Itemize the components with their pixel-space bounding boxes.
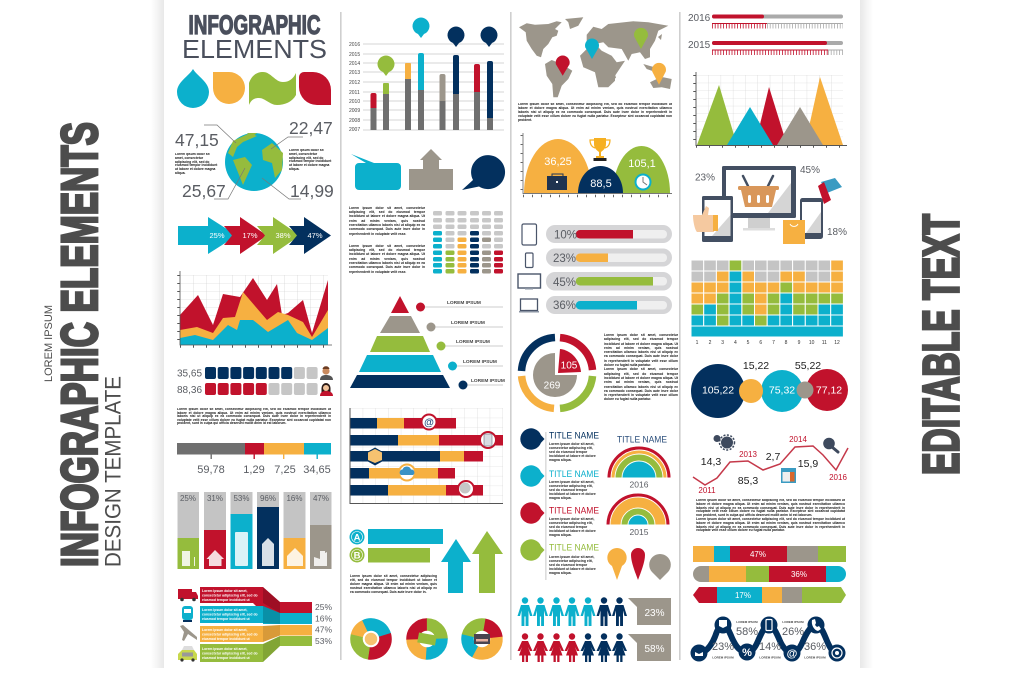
heat grid axis numbers: 11 bbox=[822, 340, 827, 346]
rainbow charts: 2016 bbox=[630, 480, 649, 490]
bar chart: buildings: 47% bbox=[313, 494, 329, 503]
icon: magnifier bbox=[823, 438, 838, 452]
wavy icon chain: 14% bbox=[759, 641, 781, 653]
pyramid chart: LOREM IPSUM bbox=[471, 378, 505, 384]
bar chart: buildings: 31% bbox=[207, 494, 223, 503]
marker pins bbox=[607, 548, 671, 580]
wavy icon chain: @ bbox=[787, 648, 798, 660]
arrow chain bbox=[178, 217, 331, 254]
icon: briefcase bbox=[547, 174, 567, 190]
line chart: 2014 bbox=[789, 435, 807, 444]
text: paragraph column 2 lower: Lorem ipsum dolor sit amet, consectetur adipiscing elit, sed do eiusmod tempor incididunt ut labore et dolore magna aliqua. Ut enim ad minim veniam, quis nostrud exercitation ullamco laboris nisi ut aliquip ex ea commodo consequat. Duis aute irure dolor in reprehenderit in voluptate velit esse. bbox=[349, 244, 425, 274]
bar chart: buildings: 53% bbox=[233, 494, 250, 503]
pyramid chart: LOREM IPSUM bbox=[447, 300, 481, 306]
ribbon chart: consectetur adipiscing elit, sed do bbox=[202, 594, 258, 598]
A B bars bbox=[350, 529, 443, 562]
rainbow charts: TITLE NAME bbox=[617, 434, 667, 444]
icon: train bbox=[182, 606, 193, 622]
ribbon chart: 53% bbox=[315, 636, 332, 646]
ribbon chart: consectetur adipiscing elit, sed do bbox=[202, 632, 258, 636]
title list: TITLE NAME bbox=[549, 542, 599, 552]
icon: tablet badge bbox=[480, 432, 496, 448]
title list: sed do eiusmod tempor bbox=[549, 488, 588, 492]
wavy icon chain: LOREM IPSUM bbox=[782, 620, 804, 624]
pyramid chart: LOREM IPSUM bbox=[463, 359, 497, 365]
donut: credit card bbox=[462, 619, 502, 659]
heat grid axis numbers bbox=[696, 340, 840, 346]
title list: Lorem ipsum dolor sit amet, bbox=[549, 480, 594, 484]
heat grid axis numbers: 4 bbox=[734, 340, 737, 346]
ribbon chart: Lorem ipsum dolor sit amet, bbox=[202, 608, 247, 612]
device shopping illustration: 45% bbox=[800, 165, 820, 176]
segmented bar: rounded: 36% bbox=[791, 570, 807, 579]
wavy icon chain: 26% bbox=[782, 626, 804, 638]
title list: TITLE NAME bbox=[549, 469, 599, 479]
ribbon chart: 16% bbox=[315, 614, 332, 624]
icon: disc badge bbox=[458, 481, 474, 497]
title list: consectetur adipiscing elit, bbox=[549, 446, 593, 450]
bubble chart: 105,22 bbox=[702, 384, 734, 396]
area chart bbox=[178, 271, 332, 346]
title list: consectetur adipiscing elit, bbox=[549, 559, 593, 563]
ribbon chart: Lorem ipsum dolor sit amet, bbox=[202, 589, 247, 593]
icon: thumbs up bbox=[693, 206, 718, 232]
progress bars with device icons: 10% bbox=[554, 230, 577, 242]
title list: magna aliqua. bbox=[549, 458, 572, 462]
column chart with pins: 2010 bbox=[349, 99, 360, 105]
title list: incididunt ut labore et dolore bbox=[549, 567, 596, 571]
bar chart: buildings bbox=[178, 492, 332, 569]
left cover title: DESIGN TEMPLATE bbox=[100, 376, 126, 567]
segmented bar: square: 47% bbox=[750, 550, 766, 559]
radial chart: 269 bbox=[544, 380, 561, 392]
heat grid bbox=[691, 260, 843, 337]
icon: clock bbox=[634, 174, 652, 190]
bubble chart: 55,22 bbox=[795, 360, 821, 372]
hill chart: 105,1 bbox=[628, 158, 656, 170]
icon: plane bbox=[180, 625, 197, 641]
heading: infographic elements bbox=[182, 10, 327, 64]
icon: trophy bbox=[590, 138, 610, 161]
wavy icon chain: 36% bbox=[804, 641, 826, 653]
wavy icon chain: LOREM IPSUM bbox=[759, 656, 781, 660]
ribbon chart: consectetur adipiscing elit, sed do bbox=[202, 612, 258, 616]
heat grid axis numbers: 1 bbox=[696, 340, 699, 346]
hill chart: 88,5 bbox=[590, 178, 612, 190]
ribbon chart: 25% bbox=[315, 602, 332, 612]
wavy icon chain bbox=[690, 616, 846, 662]
arrow chain: 47% bbox=[307, 231, 323, 240]
donut: banknote bbox=[411, 623, 443, 655]
text: radial paragraphs bbox=[604, 333, 678, 415]
title list: Lorem ipsum dolor sit amet, bbox=[549, 517, 594, 521]
square rows: men and women: 35,65 bbox=[177, 368, 202, 380]
world map bbox=[519, 17, 672, 97]
ribbon chart: consectetur adipiscing elit, sed do bbox=[202, 652, 258, 656]
people row: men: 23% bbox=[644, 608, 665, 619]
device shopping illustration: 23% bbox=[695, 172, 715, 184]
text: line chart paragraphs: Lorem ipsum dolor sit amet, consectetur adipiscing elit, sed do eiusmod tempor incididunt ut labore et dolore magna aliqua. Ut enim ad minim veniam, quis nostrud exercitation ullamco laboris nisi ut aliquip ex ea commodo consequat. Duis aute irure dolor in reprehenderit in voluptate velit esse cillum dolore eu fugiat nulla pariatur. bbox=[696, 517, 845, 532]
wavy icon chain: 58% bbox=[736, 626, 758, 638]
bubble chart: 15,22 bbox=[743, 360, 769, 372]
segmented bar: arrow: 17% bbox=[735, 591, 751, 600]
ribbon chart bbox=[178, 587, 332, 662]
segmented bar with values: 59,78 bbox=[197, 464, 225, 476]
icon: gears bbox=[714, 435, 734, 450]
column chart with pins: 2009 bbox=[349, 108, 360, 114]
segmented bar with values: 34,65 bbox=[303, 464, 331, 476]
title list: Lorem ipsum dolor sit amet, bbox=[549, 555, 594, 559]
line chart: 14,3 bbox=[701, 456, 721, 468]
A B bars: A bbox=[354, 532, 361, 544]
progress bars with device icons bbox=[518, 224, 672, 314]
heading: infographic elements: INFOGRAPHIC bbox=[188, 10, 320, 40]
heat grid axis numbers: 3 bbox=[721, 340, 724, 346]
progress bars with device icons: 45% bbox=[553, 277, 576, 289]
segmented bar with values bbox=[177, 443, 331, 476]
icon: price tags bbox=[818, 178, 842, 204]
text: line chart paragraphs bbox=[696, 499, 845, 541]
title list: magna aliqua. bbox=[549, 496, 572, 500]
title list: sed do eiusmod tempor bbox=[549, 563, 588, 567]
icon: at sign: @ bbox=[424, 418, 434, 428]
speech shapes bbox=[351, 149, 505, 190]
icon: phone bbox=[526, 253, 533, 268]
title list: sed do eiusmod tempor bbox=[549, 450, 588, 454]
heat grid axis numbers: 9 bbox=[798, 340, 801, 346]
radial chart bbox=[522, 338, 592, 408]
pyramid chart bbox=[350, 296, 505, 390]
year progress 2016 bbox=[688, 13, 843, 26]
arrow chain: 38% bbox=[275, 231, 291, 240]
bubble chart: 77,12 bbox=[816, 384, 842, 396]
title list: consectetur adipiscing elit, bbox=[549, 521, 593, 525]
globe with values bbox=[175, 118, 334, 201]
bubble chart bbox=[691, 360, 848, 418]
people row: women: 58% bbox=[644, 644, 665, 655]
globe with values: 47,15 bbox=[175, 130, 219, 150]
hill chart bbox=[522, 133, 672, 196]
globe with values: 14,99 bbox=[290, 181, 334, 201]
icon: car bbox=[178, 646, 197, 662]
line chart: 2,7 bbox=[766, 451, 780, 463]
line chart: 2011 bbox=[698, 486, 716, 495]
column chart with pins bbox=[349, 18, 504, 133]
globe with values: 22,47 bbox=[289, 118, 333, 138]
title list: sed do eiusmod tempor bbox=[549, 525, 588, 529]
ribbon chart: Lorem ipsum dolor sit amet, bbox=[202, 628, 247, 632]
wavy icon chain: % bbox=[742, 647, 752, 659]
wavy icon chain: LOREM IPSUM bbox=[712, 656, 734, 660]
heat grid axis numbers: 8 bbox=[785, 340, 788, 346]
square rows: men and women bbox=[177, 366, 333, 396]
arrow chain: 17% bbox=[242, 231, 258, 240]
ribbon chart: eiusmod tempor incididunt ut bbox=[202, 617, 251, 621]
icon: calendar bbox=[781, 468, 796, 483]
title list: incididunt ut labore et dolore bbox=[549, 454, 596, 458]
icon: navy pin bbox=[480, 27, 498, 47]
icon: laptop bbox=[519, 299, 539, 312]
title list bbox=[520, 428, 599, 580]
title list: incididunt ut labore et dolore bbox=[549, 492, 596, 496]
column chart with pins: 2008 bbox=[349, 118, 360, 124]
wavy icon chain: LOREM IPSUM bbox=[804, 656, 826, 660]
icon: woman bbox=[320, 383, 333, 396]
device shopping illustration bbox=[693, 165, 847, 244]
bubble chart: 75,32 bbox=[769, 384, 795, 396]
title list: consectetur adipiscing elit, bbox=[549, 484, 593, 488]
line chart: 2016 bbox=[829, 473, 847, 482]
icon: phone bbox=[800, 198, 823, 239]
column chart with pins: 2015 bbox=[349, 52, 360, 58]
bar chart: buildings: 16% bbox=[286, 494, 303, 503]
year progress 2015: 2015 bbox=[688, 40, 711, 51]
ribbon chart: 47% bbox=[315, 624, 332, 634]
text: radial paragraphs: Lorem ipsum dolor sit amet, consectetur adipiscing elit, sed do eiusmod tempor incididunt ut labore et dolore magna aliqua. Ut enim ad minim veniam, quis nostrud exercitation ullamco laboris nisi ut aliquip ex ea commodo consequat. Duis aute irure dolor in reprehenderit in voluptate velit esse cillum dolore eu fugiat nulla pariatur. bbox=[604, 333, 678, 367]
poster sheet bbox=[151, 0, 873, 668]
gantt chart bbox=[350, 408, 503, 504]
line chart: 85,3 bbox=[738, 475, 758, 487]
bar chart: buildings: 96% bbox=[260, 494, 276, 503]
coloured shapes row bbox=[177, 69, 331, 108]
text: radial paragraphs: Lorem ipsum dolor sit amet, consectetur adipiscing elit, sed do eiusmod tempor incididunt ut labore et dolore magna aliqua. Ut enim ad minim veniam, quis nostrud exercitation ullamco laboris nisi ut aliquip ex ea commodo consequat. Duis aute irure dolor in reprehenderit in voluptate velit esse cillum dolore eu fugiat nulla pariatur. bbox=[604, 367, 678, 401]
icon: tablet bbox=[702, 196, 733, 242]
ribbon chart: eiusmod tempor incididunt ut bbox=[202, 656, 251, 660]
title list: TITLE NAME bbox=[549, 430, 599, 440]
year progress 2016: 2016 bbox=[688, 13, 711, 24]
heat grid axis numbers: 5 bbox=[747, 340, 750, 346]
heat grid axis numbers: 6 bbox=[759, 340, 762, 346]
icon: monitor bbox=[518, 274, 540, 290]
column chart with pins: 2016 bbox=[349, 42, 360, 48]
triangle chart bbox=[694, 72, 847, 146]
line chart bbox=[693, 435, 848, 495]
column chart with pins: 2011 bbox=[349, 90, 360, 96]
heat grid axis numbers: 2 bbox=[709, 340, 712, 346]
title list: TITLE NAME bbox=[549, 506, 599, 516]
icon: green pin bbox=[377, 56, 394, 76]
segmented bar with values: 1,29 bbox=[243, 464, 265, 476]
icon: shopping bag bbox=[783, 220, 805, 244]
column chart with pins: 2007 bbox=[349, 127, 360, 133]
icon: hexagon badge bbox=[367, 448, 383, 466]
column chart with pins: 2013 bbox=[349, 70, 360, 76]
icon: tablet bbox=[522, 224, 536, 245]
text: paragraph column 2 upper: Lorem ipsum dolor sit amet, consectetur adipiscing elit, sed do eiusmod tempor incididunt ut labore et dolore magna aliqua. Ut enim ad minim veniam, quis nostrud exercitation ullamco laboris nisi ut aliquip ex ea commodo consequat. Duis aute irure dolor in reprehenderit in voluptate velit esse. bbox=[349, 206, 425, 236]
progress bars with device icons: 36% bbox=[553, 300, 576, 312]
people row: men bbox=[518, 597, 671, 626]
arrow chain: 25% bbox=[209, 231, 225, 240]
title list: Lorem ipsum dolor sit amet, bbox=[549, 442, 594, 446]
device shopping illustration: 18% bbox=[827, 227, 847, 238]
segmented bar: rounded bbox=[693, 566, 846, 582]
line chart: 15,9 bbox=[798, 458, 818, 470]
square rows: men and women: 88,36 bbox=[177, 385, 202, 396]
ribbon chart: eiusmod tempor incididunt ut bbox=[202, 598, 251, 602]
heat grid axis numbers: 12 bbox=[834, 340, 840, 346]
icon: monitor with basket bbox=[722, 166, 796, 230]
text: paragraph under bars: Lorem ipsum dolor sit amet, consectetur adipiscing elit, sed do eiusmod tempor incididunt ut labore et dolore magna aliqua. Ut enim ad minim veniam, quis nostrud exercitation ullamco laboris nisi ut aliquip ex ea commodo consequat. Duis aute irure dolor in. bbox=[350, 574, 437, 594]
title list: magna aliqua. bbox=[549, 533, 572, 537]
people row: women bbox=[518, 633, 671, 662]
column chart with pins: 2012 bbox=[349, 80, 360, 86]
pyramid chart: LOREM IPSUM bbox=[451, 320, 485, 326]
ribbon chart: eiusmod tempor incididunt ut bbox=[202, 637, 251, 641]
rainbow charts: 2015 bbox=[630, 527, 649, 537]
heading: infographic elements: ELEMENTS bbox=[182, 34, 327, 64]
segmented bar: square bbox=[693, 546, 846, 562]
left cover title: LOREM IPSUM bbox=[43, 305, 55, 382]
up arrows bbox=[441, 531, 503, 593]
wavy icon chain: 23% bbox=[712, 641, 734, 653]
bar chart: buildings: 25% bbox=[180, 494, 196, 503]
line chart: 2013 bbox=[739, 450, 757, 459]
icon: cloud badge bbox=[399, 464, 415, 480]
hill chart: 36,25 bbox=[544, 156, 572, 168]
title list: incididunt ut labore et dolore bbox=[549, 529, 596, 533]
wavy icon chain: LOREM IPSUM bbox=[736, 620, 758, 624]
right cover title: EDITABLE TEXT bbox=[912, 214, 970, 475]
icon: van bbox=[178, 589, 198, 601]
heat grid axis numbers: 10 bbox=[809, 340, 815, 346]
icon: at sign bbox=[422, 414, 436, 430]
radial chart: 105 bbox=[561, 360, 578, 372]
donut: coin bbox=[352, 620, 390, 658]
segmented bar: arrow bbox=[693, 587, 846, 603]
rainbow charts bbox=[606, 434, 671, 537]
column chart with pins: 2014 bbox=[349, 61, 360, 67]
title list: magna aliqua. bbox=[549, 571, 572, 575]
progress bars with device icons: 23% bbox=[553, 253, 576, 265]
pyramid chart: LOREM IPSUM bbox=[456, 339, 490, 345]
pill matrix bbox=[433, 211, 503, 274]
left cover title bbox=[43, 122, 126, 567]
heat grid axis numbers: 7 bbox=[772, 340, 775, 346]
segmented bar with values: 7,25 bbox=[274, 464, 296, 476]
icon: man bbox=[320, 366, 333, 380]
icon: teal pin bbox=[412, 18, 429, 38]
year progress 2015 bbox=[688, 40, 843, 52]
globe with values: 25,67 bbox=[182, 181, 226, 201]
ribbon chart: Lorem ipsum dolor sit amet, bbox=[202, 647, 247, 651]
A B bars: B bbox=[354, 550, 361, 562]
icon: navy pin bbox=[448, 27, 464, 47]
